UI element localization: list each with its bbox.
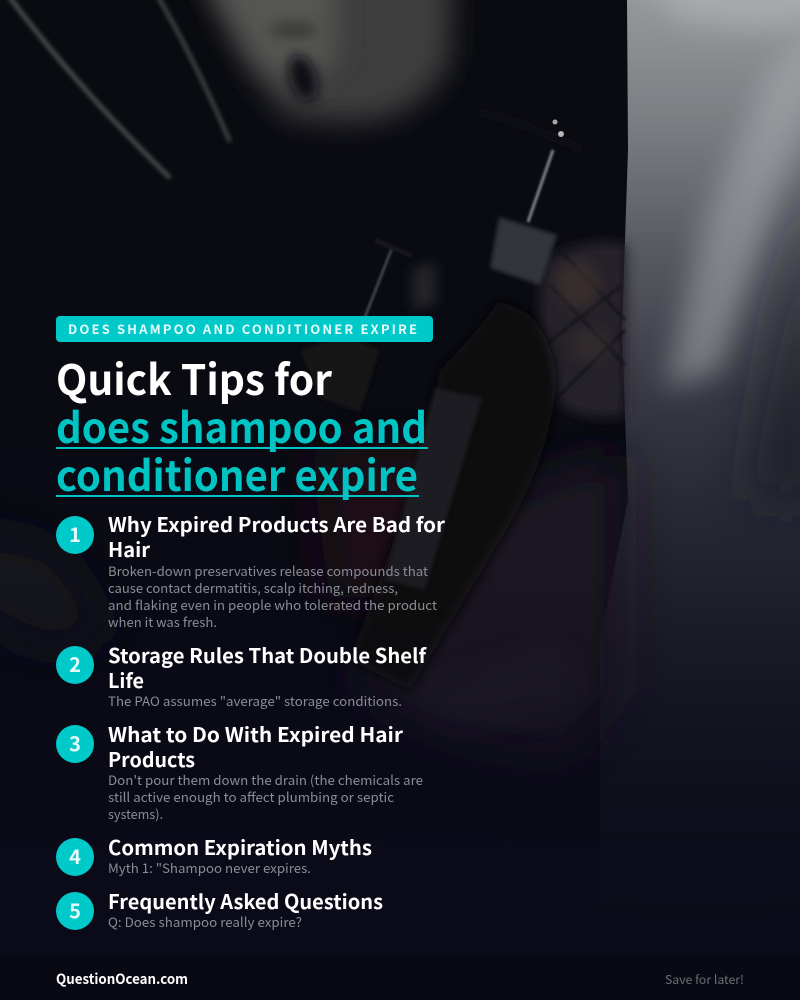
tip 5: FAQ: Frequently Asked Questions [108,886,383,915]
tip 3: what to do with expired products: Products [108,744,195,773]
tip 1: why expired products are bad: Hair [108,534,150,563]
tip 2: storage rules: 2 [69,649,81,678]
tip 4: common myths: Myth 1: "Shampoo never expires. [108,858,311,877]
tip 2: storage rules: Storage Rules That Double Shelf [108,640,428,669]
title: Quick Tips for [56,347,333,408]
tip 3: what to do with expired products: systems). [108,804,163,823]
tag label: DOES SHAMPOO AND CONDITIONER EXPIRE [68,319,417,338]
tip 3: what to do with expired products: Don't pour them down the drain (the chemicals are [108,770,423,789]
tip 1: why expired products are bad: cause contact dermatitis, scalp itching, redness, [108,578,398,597]
tip 3: what to do with expired products: still active enough to affect plumbing or septic [108,787,394,806]
footer [56,969,744,989]
footer: Save for later! [665,971,744,988]
tip 1: why expired products are bad: Why Expired Products Are Bad for [108,509,445,538]
background photo: person holding bottles [0,0,800,761]
tip 1: why expired products are bad: 1 [69,519,81,548]
footer: QuestionOcean.com [56,969,188,989]
title: conditioner expire [56,443,418,504]
tip 3: what to do with expired products: What to Do With Expired Hair [108,719,403,748]
tag label [56,316,433,342]
tip 3: what to do with expired products [56,719,423,823]
tip 1: why expired products are bad: when it was fresh. [108,612,217,631]
tip 4: common myths [56,832,372,877]
tip 4: common myths: Common Expiration Myths [108,832,372,861]
tip 5: FAQ [56,886,383,931]
tip 1: why expired products are bad [56,509,445,631]
tip 4: common myths: 4 [69,841,81,870]
tip 1: why expired products are bad: Broken-down preservatives release compounds that [108,561,428,580]
tip 2: storage rules [56,640,428,710]
tip 5: FAQ: 5 [69,895,81,924]
title [56,347,428,504]
tip 3: what to do with expired products: 3 [69,728,81,757]
tip 1: why expired products are bad: and flaking even in people who tolerated the product [108,595,437,614]
title: does shampoo and [56,395,427,456]
tip 5: FAQ: Q: Does shampoo really expire? [108,912,302,931]
tip 2: storage rules: The PAO assumes "average" storage conditions. [108,691,402,710]
tip 2: storage rules: Life [108,665,144,694]
